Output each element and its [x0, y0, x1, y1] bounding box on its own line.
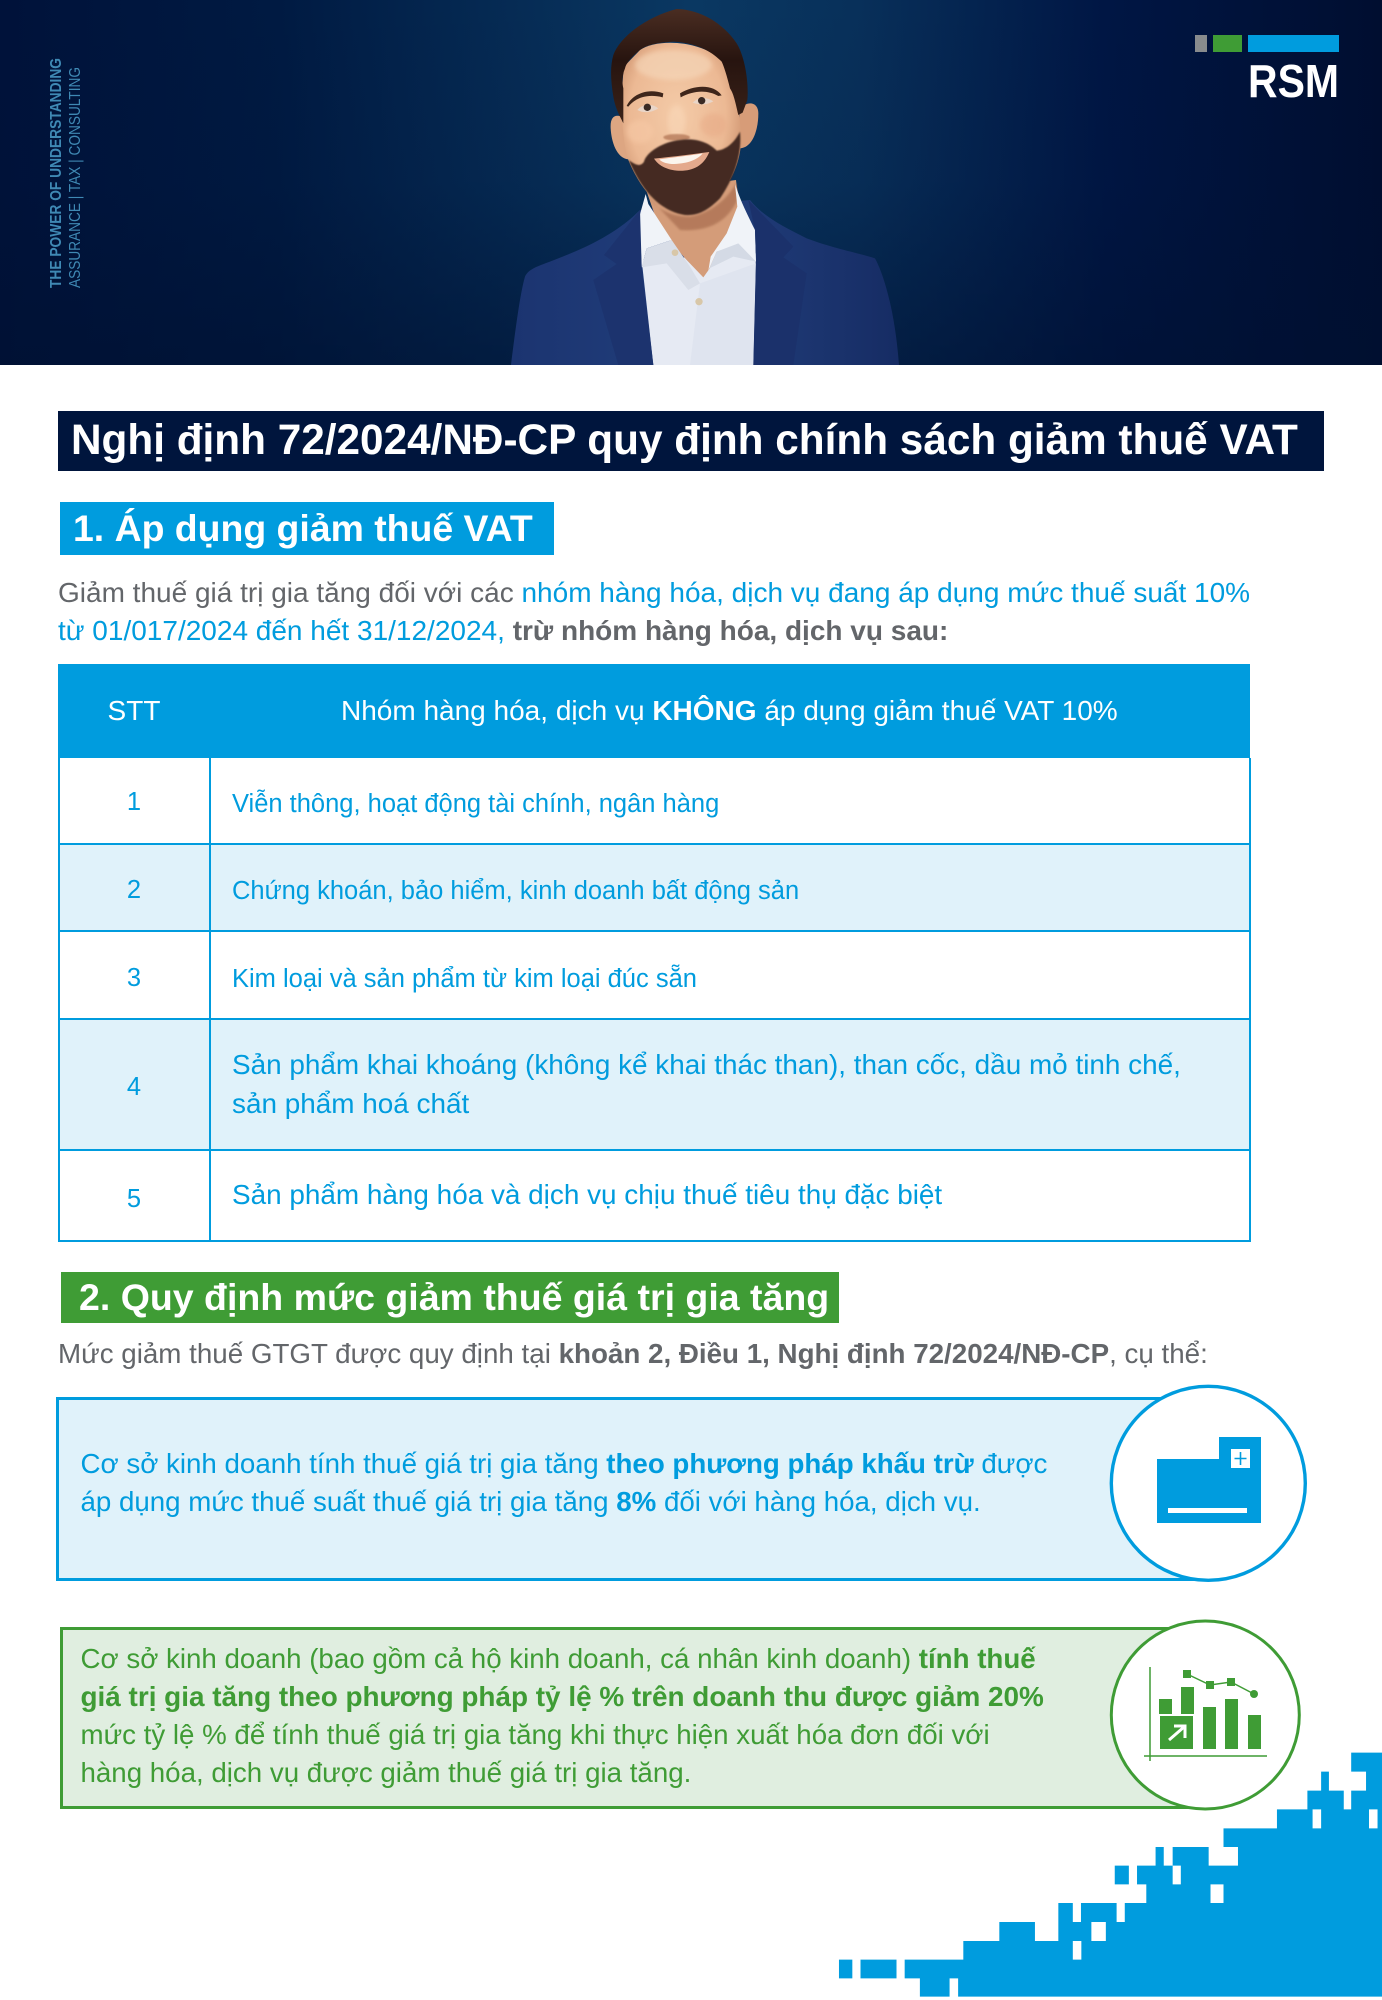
callout: percentage method: giá trị gia tăng theo phương pháp tỷ lệ % trên doanh thu được giảm 20% [80, 1681, 1044, 1712]
section 2 intro text: Mức giảm thuế GTGT được quy định tại khoản 2, Điều 1, Nghị định 72/2024/NĐ-CP, cụ thể: [58, 1338, 1208, 1369]
row 4: 4 [127, 1073, 141, 1101]
portrait photo of man in blue suit [511, 9, 899, 365]
tagline line 2: ASSURANCE | TAX | CONSULTING [67, 67, 84, 288]
row 1: Viễn thông, hoạt động tài chính, ngân hàng [232, 789, 719, 818]
RSM logo: RSM [1248, 55, 1339, 107]
header banner [0, 0, 1382, 365]
vertical tagline [48, 58, 84, 288]
callout: percentage method: mức tỷ lệ % để tính thuế giá trị gia tăng khi thực hiện xuất hóa đơn đối với [80, 1719, 990, 1750]
section 1 intro text: Giảm thuế giá trị gia tăng đối với các nhóm hàng hóa, dịch vụ đang áp dụng mức thuế suất 10% [58, 577, 1250, 608]
section 1 heading: 1. Áp dụng giảm thuế VAT [73, 507, 533, 549]
row 3: Kim loại và sản phẩm từ kim loại đúc sẵn [232, 964, 697, 993]
section 1 intro text [58, 577, 1250, 646]
table header [58, 664, 1250, 758]
table header: STT [108, 695, 160, 726]
callout: deduction method: Cơ sở kinh doanh tính thuế giá trị gia tăng theo phương pháp khấu trừ được [80, 1448, 1047, 1479]
callout: deduction method: áp dụng mức thuế suất thuế giá trị gia tăng 8% đối với hàng hóa, dịch vụ. [80, 1486, 981, 1517]
section 1 intro text: từ 01/017/2024 đến hết 31/12/2024, trừ nhóm hàng hóa, dịch vụ sau: [58, 615, 948, 646]
row 4 [127, 1049, 1181, 1119]
main title: Nghị định 72/2024/NĐ-CP quy định chính sách giảm thuế VAT [71, 416, 1298, 463]
table header: Nhóm hàng hóa, dịch vụ KHÔNG áp dụng giảm thuế VAT 10% [341, 694, 1118, 726]
row 5: 5 [127, 1185, 141, 1213]
row 4: Sản phẩm khai khoáng (không kể khai thác than), than cốc, dầu mỏ tinh chế, [232, 1049, 1181, 1080]
row 1: 1 [127, 788, 141, 816]
RSM logo [1195, 35, 1339, 107]
row 2: 2 [127, 876, 141, 904]
table of excluded goods and services [58, 664, 1250, 1241]
callout: deduction method [58, 1386, 1305, 1580]
tagline line 1: THE POWER OF UNDERSTANDING [48, 58, 65, 288]
row 3: 3 [127, 964, 141, 992]
callout: percentage method: Cơ sở kinh doanh (bao gồm cả hộ kinh doanh, cá nhân kinh doanh) tính thuế [80, 1643, 1036, 1674]
table row backgrounds [59, 758, 1250, 1241]
row 5: Sản phẩm hàng hóa và dịch vụ chịu thuế tiêu thụ đặc biệt [232, 1179, 942, 1210]
icon: bar chart [1111, 1621, 1299, 1809]
decorative pixel staircase [839, 1753, 1382, 1997]
section 2 heading: 2. Quy định mức giảm thuế giá trị gia tăng [79, 1276, 829, 1318]
row 4: sản phẩm hoá chất [232, 1088, 469, 1119]
callout: percentage method [62, 1621, 1299, 1809]
icon: folder [1111, 1386, 1305, 1580]
callout: percentage method: hàng hóa, dịch vụ được giảm thuế giá trị gia tăng. [80, 1757, 691, 1788]
row 2: Chứng khoán, bảo hiểm, kinh doanh bất động sản [232, 877, 799, 905]
